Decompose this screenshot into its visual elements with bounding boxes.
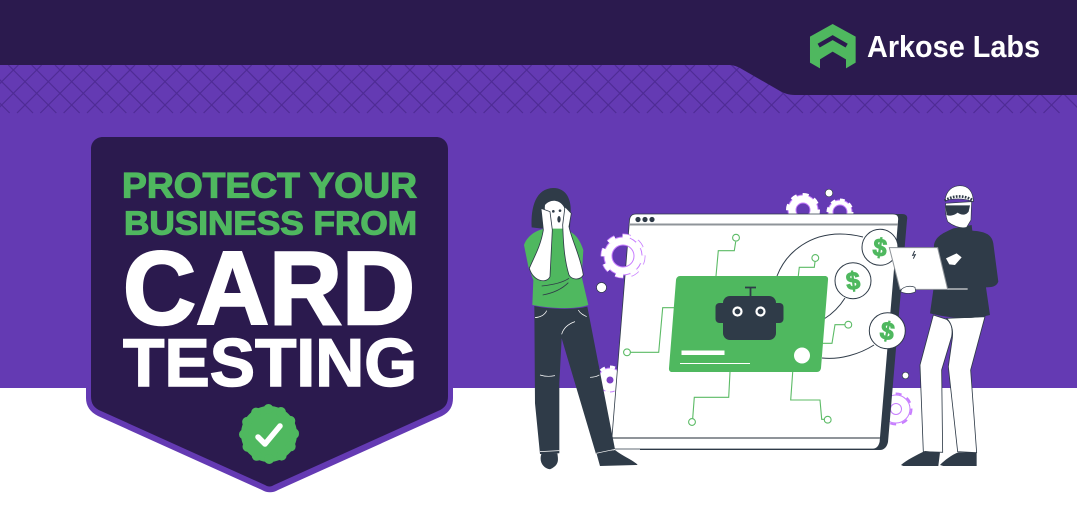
fingers — [901, 286, 916, 293]
card chip dot — [794, 348, 810, 364]
beanie band — [945, 196, 973, 201]
lattice pattern — [0, 65, 1077, 113]
facial features — [552, 209, 561, 223]
icon: check badge — [241, 406, 297, 462]
shield panel — [86, 137, 453, 492]
dollar badge 2: $ — [845, 267, 862, 296]
heading line: card: CARD — [123, 231, 415, 347]
gear top center — [788, 195, 818, 225]
green bot card — [669, 276, 828, 372]
window dark backing — [640, 214, 907, 450]
shoes — [901, 451, 977, 466]
window control dots — [635, 217, 655, 222]
heading line: business from: BUSINESS FROM — [124, 204, 417, 241]
pants — [534, 306, 615, 454]
card line — [680, 362, 750, 364]
head — [945, 202, 972, 228]
gear lower left — [597, 367, 623, 393]
purple background band — [0, 60, 1077, 388]
eye mask — [945, 205, 970, 216]
gear top right — [828, 200, 852, 224]
logo wordmark: Arkose Labs — [867, 29, 1040, 64]
laptop base — [948, 287, 968, 291]
shoes — [541, 450, 638, 469]
dollar badge 3: $ — [877, 316, 897, 347]
window top rule — [629, 224, 898, 226]
trousers — [920, 315, 985, 453]
logo: Arkose Labs — [810, 24, 1040, 68]
gears behind window — [597, 195, 912, 424]
laptop logo — [913, 251, 915, 259]
shield dark body — [91, 137, 448, 486]
dollar badges — [835, 229, 905, 349]
hair — [532, 188, 571, 228]
shirt folds — [542, 278, 569, 295]
worried woman figure — [524, 188, 638, 469]
face and neck — [545, 201, 566, 230]
top dark header band — [0, 0, 1077, 95]
heading line: testing: TESTING — [123, 325, 417, 401]
icon: robot — [716, 288, 784, 340]
laptop — [889, 248, 948, 289]
front gear left — [603, 236, 643, 276]
shield outer border — [86, 385, 453, 492]
window bottom rule — [612, 437, 880, 439]
sweater — [930, 225, 998, 318]
arms — [529, 207, 583, 281]
heading line: protect your: PROTECT YOUR — [122, 166, 417, 206]
shirt — [524, 229, 588, 308]
card bar — [682, 350, 724, 355]
circuit lines — [624, 234, 852, 425]
pants creases — [535, 310, 615, 453]
beanie — [945, 186, 973, 202]
gear lower right — [880, 394, 912, 424]
thief figure — [889, 186, 998, 466]
card body — [669, 276, 828, 372]
browser window — [611, 214, 907, 450]
network arcs — [777, 234, 874, 358]
dollar badge 1: $ — [871, 233, 889, 263]
window white page — [611, 214, 899, 449]
icon: logo hexagon — [810, 24, 856, 68]
white dots — [596, 189, 909, 379]
crossed hand — [946, 253, 962, 265]
